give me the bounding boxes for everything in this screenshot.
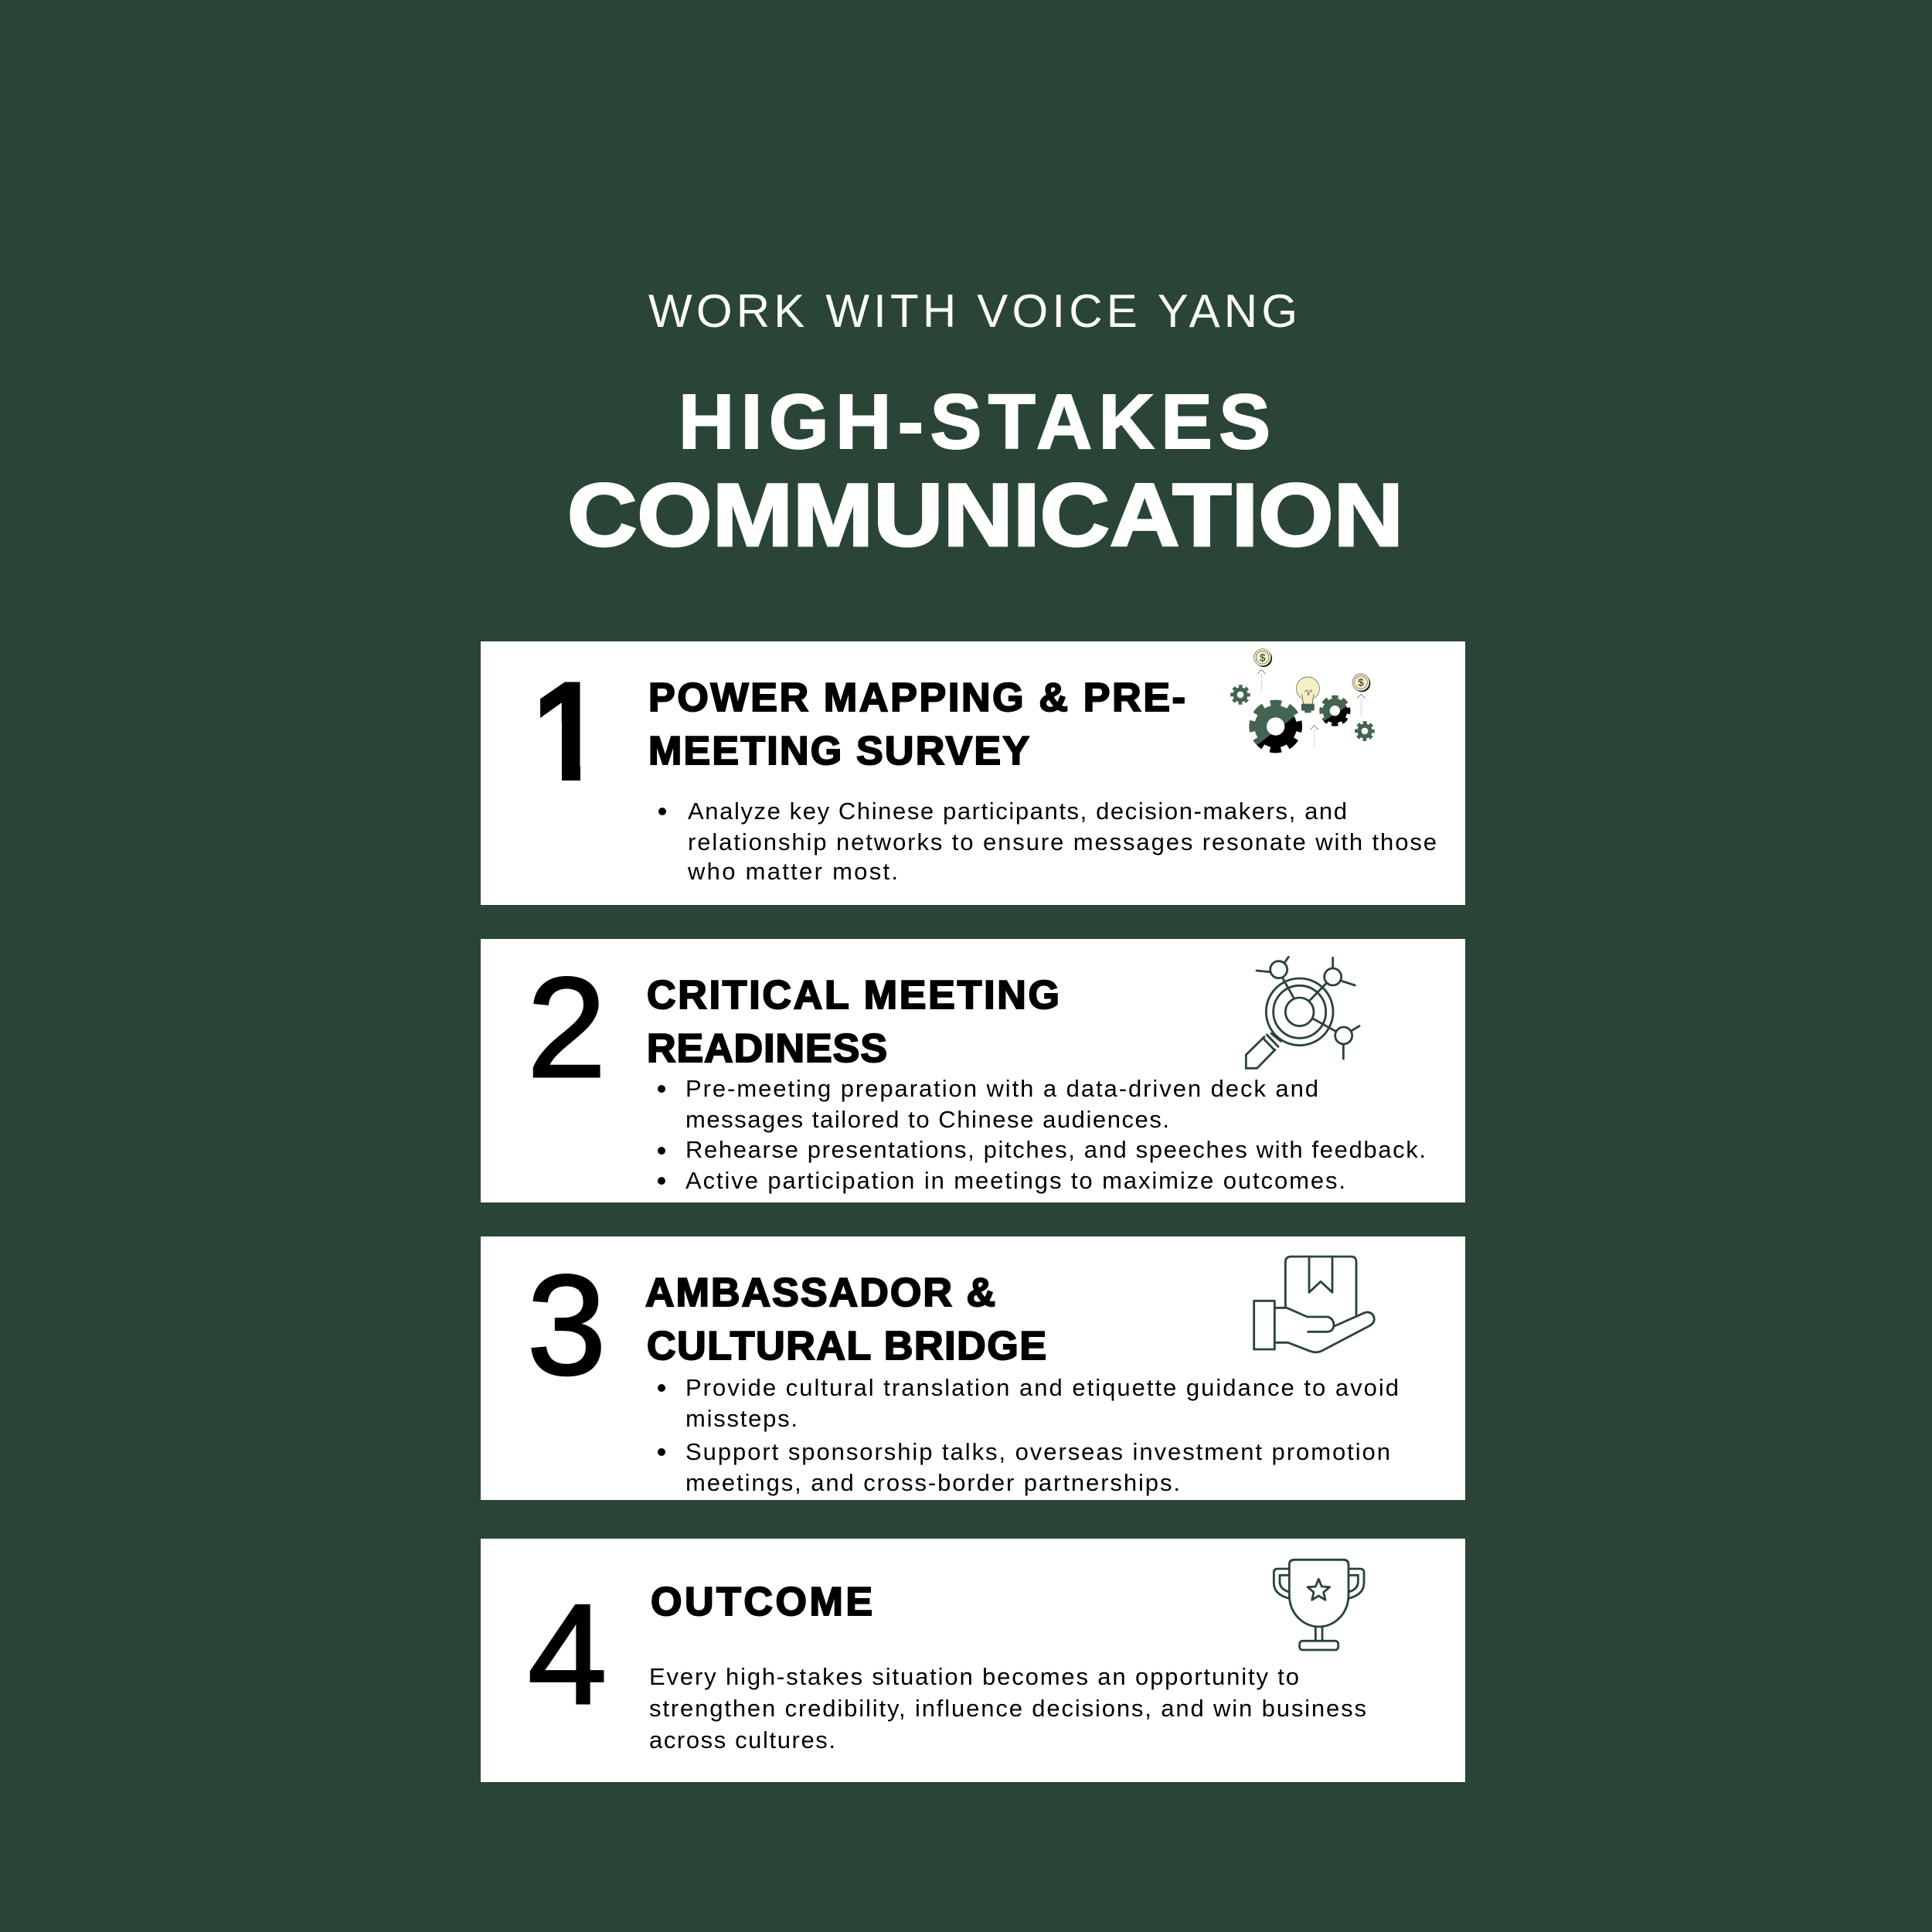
heading: critical meeting readiness: CRITICAL MEETING: [647, 973, 1060, 1018]
heading: critical meeting readiness: READINESS: [647, 1026, 887, 1071]
heading: critical meeting readiness: [647, 973, 1060, 1071]
heading: power mapping: MEETING SURVEY: [648, 729, 1029, 774]
bullet list: [658, 1374, 1399, 1496]
bullet list: missteps.: [685, 1405, 798, 1432]
bullet list: messages tailored to Chinese audiences.: [685, 1106, 1169, 1133]
outcome text: Every high-stakes situation becomes an opportunity to: [649, 1663, 1299, 1690]
subtitle: WORK WITH VOICE YANG: [648, 285, 1298, 337]
bullet list: Support sponsorship talks, overseas investment promotion: [685, 1438, 1390, 1465]
bullet list: Rehearse presentations, pitches, and speeches with feedback.: [685, 1136, 1426, 1163]
panel: step 1: [481, 641, 1465, 905]
outcome text: across cultures.: [649, 1726, 835, 1753]
number 4: 4: [528, 1574, 607, 1733]
panel: step 3: [481, 1236, 1465, 1500]
title: COMMUNICATION: [567, 466, 1403, 565]
bullet list: [658, 1075, 1426, 1194]
bullet list: [658, 798, 1437, 885]
number 3: 3: [527, 1245, 606, 1404]
title: [567, 379, 1403, 565]
panel: step 2: [481, 939, 1465, 1202]
icon: gears, bulb and coins: $: [1358, 677, 1364, 689]
bullet list: meetings, and cross-border partnerships.: [685, 1469, 1180, 1496]
heading: power mapping: [648, 675, 1185, 774]
outcome text: strengthen credibility, influence decisions, and win business: [649, 1695, 1366, 1722]
icon: gears, bulb and coins: $: [1260, 651, 1266, 663]
icon: hand holding box: [1254, 1257, 1374, 1352]
heading: outcome: OUTCOME: [651, 1580, 872, 1624]
number 1: 1: [530, 655, 607, 809]
heading: ambassador and cultural bridge: [645, 1270, 1046, 1369]
bullet list: Analyze key Chinese participants, decision-makers, and: [688, 798, 1347, 825]
heading: power mapping: POWER MAPPING & PRE-: [648, 675, 1185, 720]
bullet list: Active participation in meetings to maximize outcomes.: [685, 1167, 1345, 1194]
bullet list: who matter most.: [687, 858, 898, 885]
number 2: 2: [527, 947, 606, 1107]
icon: trophy: [1274, 1560, 1364, 1650]
bullet list: Pre-meeting preparation with a data-driven deck and: [685, 1075, 1318, 1102]
icon: magnifier with nodes: [1246, 957, 1359, 1068]
outcome text: [649, 1663, 1366, 1753]
bullet list: Provide cultural translation and etiquette guidance to avoid: [685, 1374, 1399, 1401]
title: HIGH-STAKES: [679, 379, 1270, 465]
panel: step 4: [481, 1539, 1465, 1782]
heading: ambassador and cultural bridge: CULTURAL BRIDGE: [647, 1324, 1046, 1369]
bullet list: relationship networks to ensure messages resonate with those: [688, 828, 1437, 855]
icon: gears, bulb and coins: [1232, 649, 1373, 750]
heading: ambassador and cultural bridge: AMBASSADOR &: [645, 1270, 995, 1315]
